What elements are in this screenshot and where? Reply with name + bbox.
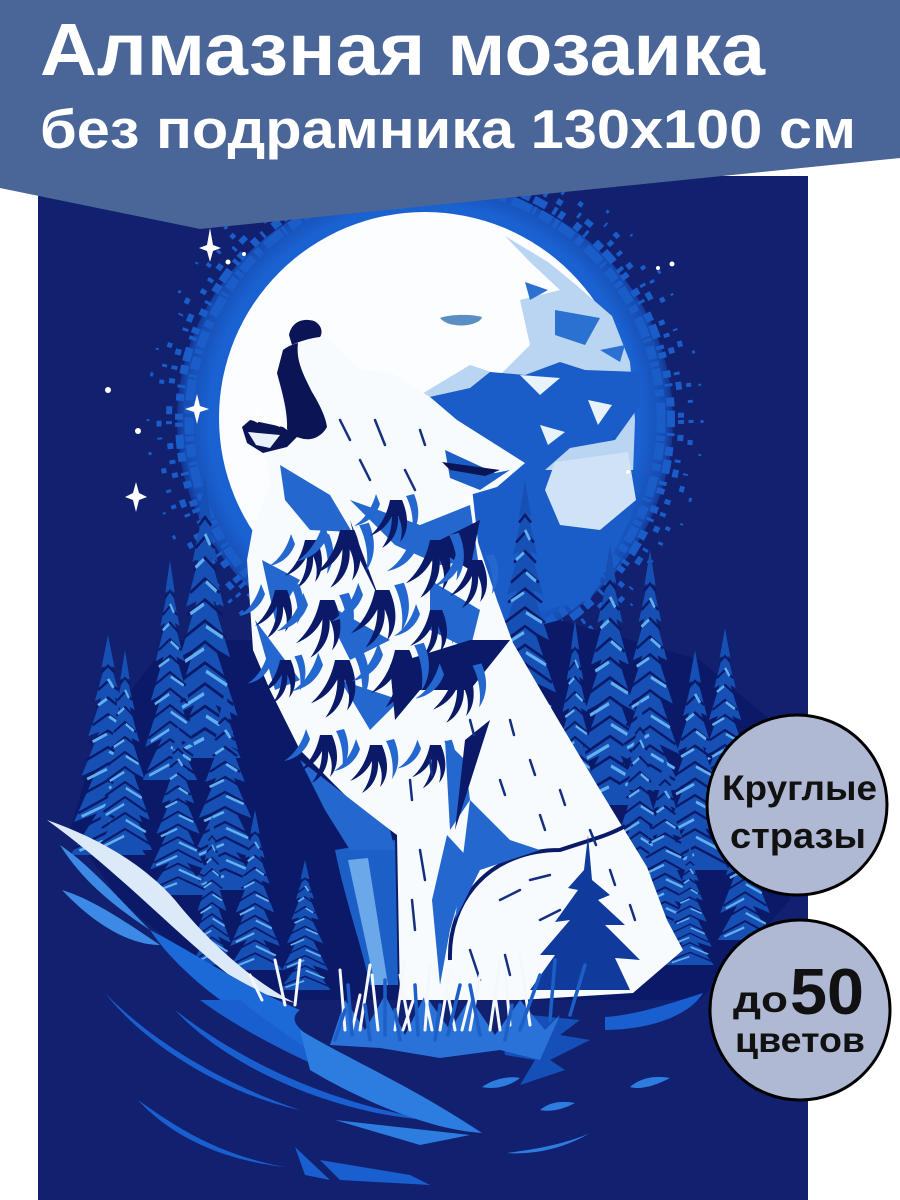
- wolf nose: [289, 320, 322, 345]
- wolf fur dashes: [340, 420, 635, 980]
- wolf back leg: [335, 840, 398, 985]
- snow bank and ground strokes: [47, 820, 703, 1185]
- wolf body silhouette: [242, 320, 683, 1000]
- wolf ear: [445, 450, 510, 490]
- wolf fur tufts: [239, 494, 498, 793]
- wolf lower jaw: [242, 420, 297, 453]
- moon: [219, 212, 640, 624]
- stars: [105, 228, 720, 692]
- badge: up to 50 colors: [710, 920, 890, 1100]
- dark forest backdrop: [70, 620, 790, 1000]
- badge: round rhinestones: Круглые: [722, 769, 877, 808]
- badge: up to 50 colors: до: [733, 979, 788, 1020]
- wolf teeth: [252, 403, 283, 427]
- forest: [71, 478, 772, 990]
- badge: round rhinestones: стразы: [730, 815, 866, 856]
- badge: round rhinestones: [707, 715, 887, 895]
- night sky background: [38, 176, 808, 1200]
- title: Алмазная мозаика: [40, 8, 766, 91]
- wolf tail outline: [450, 826, 625, 960]
- subtitle: без подрамника 130х100 см: [40, 98, 856, 160]
- badge: up to 50 colors: цветов: [735, 1021, 865, 1060]
- artwork panel: howling wolf and moon: [38, 143, 808, 1200]
- badge: up to 50 colors: 50: [790, 955, 864, 1028]
- small tree over wolf: [530, 835, 640, 990]
- moon glow: [148, 143, 702, 697]
- wolf mouth: [277, 343, 327, 439]
- grass at wolf paws: [250, 955, 585, 1060]
- wolf blue shading: [255, 465, 480, 985]
- header banner: [0, 0, 900, 229]
- wolf: [239, 320, 683, 1000]
